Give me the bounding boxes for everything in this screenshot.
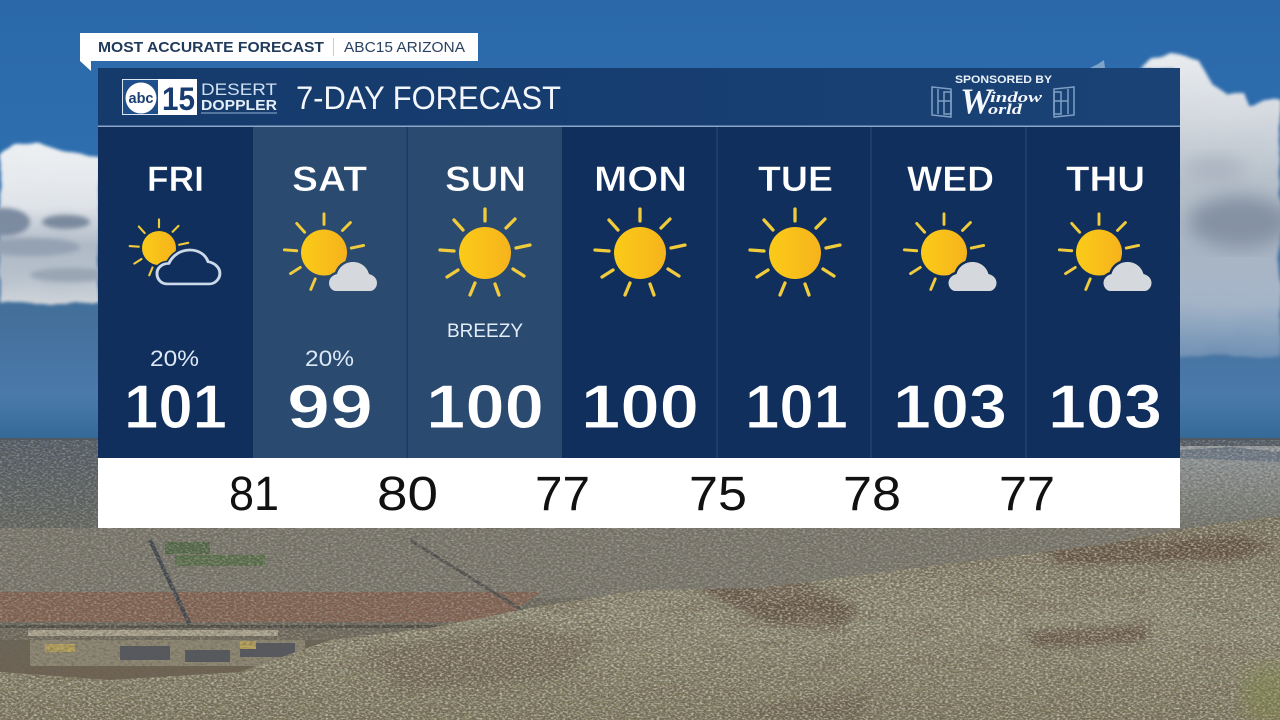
day column: MON — [562, 127, 717, 458]
low 75: 75 — [689, 468, 747, 521]
note: breezy: BREEZY — [447, 321, 523, 342]
icon: sun and grey cloud — [284, 214, 377, 291]
sponsor: window world: orld — [988, 102, 1023, 118]
sponsor: window world: W — [960, 81, 995, 121]
low 78: 78 — [843, 468, 901, 521]
icon: sun — [595, 209, 685, 295]
day column: SAT: 99 — [287, 373, 373, 442]
day column: FRI: 101 — [124, 373, 227, 442]
header bar — [98, 68, 1180, 128]
panel: overnight lows — [98, 458, 1180, 528]
low 77: 77 — [535, 468, 590, 521]
day column: MON: 100 — [581, 373, 699, 442]
day column: WED — [870, 127, 1026, 458]
tag: most accurate forecast banner: ABC15 ARIZONA — [344, 39, 465, 56]
logo: abc15 desert doppler — [122, 79, 277, 117]
day column: THU: 103 — [1048, 373, 1162, 442]
panel: forecast board — [98, 68, 1180, 458]
icon: sun behind outlined cloud — [130, 219, 220, 284]
sponsor: window world: SPONSORED BY — [955, 74, 1053, 86]
tag: most accurate forecast banner: MOST ACCURATE FORECAST — [98, 39, 324, 56]
logo: abc15 desert doppler: 15 — [162, 81, 195, 117]
icon: sun — [750, 209, 840, 295]
day column: SUN — [406, 127, 562, 458]
day column: SUN: SUN — [445, 160, 526, 199]
logo: abc15 desert doppler: DOPPLER — [201, 97, 277, 114]
day column: WED: 103 — [893, 373, 1007, 442]
tag: most accurate forecast banner — [80, 33, 478, 71]
day column: FRI: FRI — [147, 160, 204, 199]
day column: SAT — [253, 127, 407, 458]
day column: TUE: TUE — [758, 160, 833, 199]
day column: WED: WED — [907, 160, 994, 199]
day column: SAT: 20% — [305, 346, 354, 371]
low 80: 80 — [377, 468, 438, 521]
icon: sun and grey cloud — [1059, 214, 1152, 291]
low 81: 81 — [229, 468, 279, 521]
low 77: 77 — [999, 468, 1055, 521]
day column: FRI — [98, 127, 253, 458]
day column: SAT: SAT — [292, 160, 367, 199]
day column: THU: THU — [1066, 160, 1145, 199]
logo: abc15 desert doppler: DESERT — [201, 80, 277, 99]
day column: TUE: 101 — [745, 373, 848, 442]
day column: TUE — [716, 127, 871, 458]
icon: sun and grey cloud — [904, 214, 996, 291]
sponsor: window world: indow — [990, 90, 1043, 106]
title: 7-DAY FORECAST — [296, 80, 561, 116]
logo: abc15 desert doppler: abc — [128, 90, 154, 107]
icon: sun — [440, 209, 530, 295]
day column: SUN: 100 — [426, 373, 544, 442]
day column: THU — [1026, 127, 1180, 458]
day column: MON: MON — [594, 160, 687, 199]
day column: FRI: 20% — [150, 346, 199, 371]
sponsor: window world — [932, 74, 1074, 121]
